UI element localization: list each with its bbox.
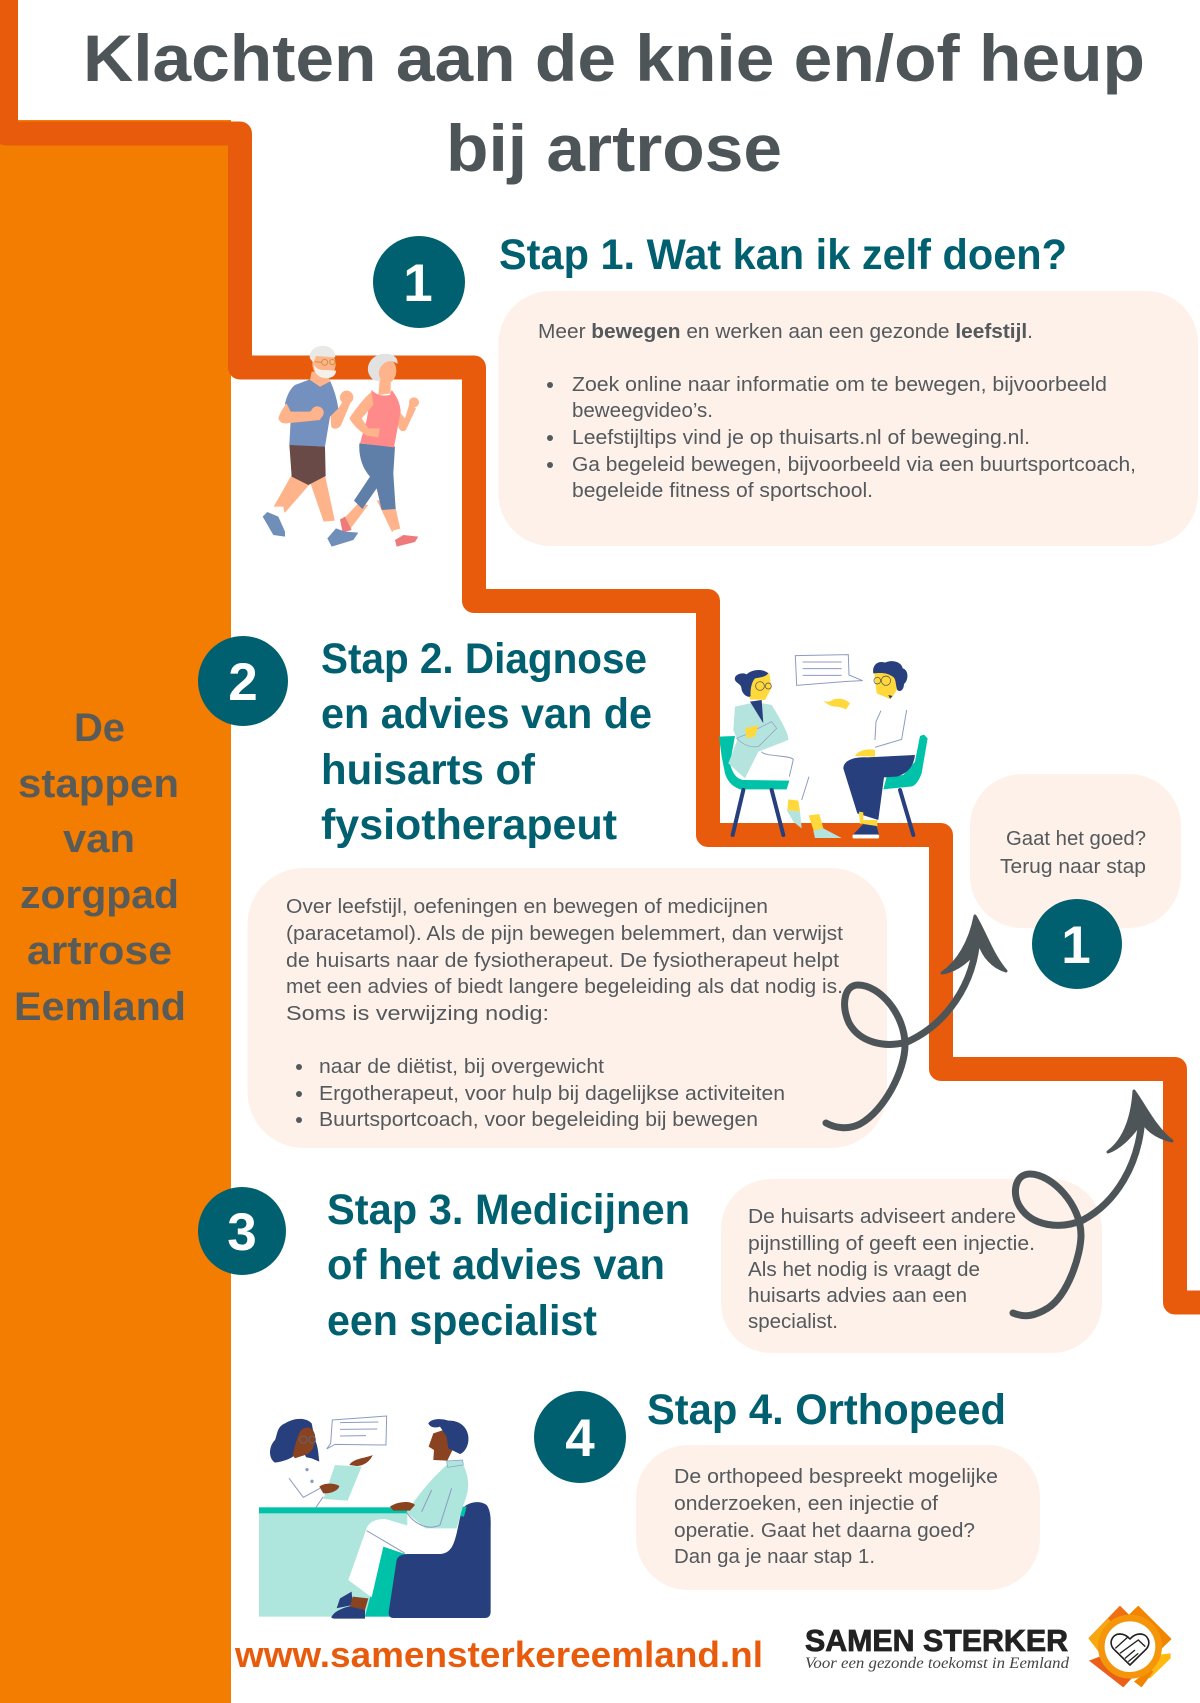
step 4 number badge: 4 — [565, 1409, 595, 1468]
panel: step 1 text: Ga begeleid bewegen, bijvoorbeeld via een buurtsportcoach, — [572, 454, 1136, 476]
side heading: artrose — [27, 929, 172, 973]
step 2 heading: Stap 2. Diagnose — [321, 635, 647, 683]
panel: step 4 text: De orthopeed bespreekt mogelijke — [674, 1466, 998, 1488]
step 1 heading: Stap 1. Wat kan ik zelf doen? — [499, 231, 1067, 279]
step 3 heading — [327, 1186, 690, 1345]
step 2 heading — [321, 635, 652, 849]
panel: step 2 text: naar de diëtist, bij overgewicht — [319, 1056, 604, 1078]
step 4 heading: Stap 4. Orthopeed — [647, 1386, 1006, 1434]
panel: step 1 text: beweegvideo’s. — [572, 400, 713, 422]
speech bubble — [795, 655, 863, 685]
panel: step 2 text: Over leefstijl, oefeningen en bewegen of medicijnen — [286, 896, 768, 918]
website url: www.samensterkereemland.nl — [234, 1634, 763, 1675]
step 3 number badge — [198, 1187, 286, 1275]
step 1 number badge — [373, 236, 465, 328]
side heading: van — [63, 817, 135, 861]
patient — [883, 735, 928, 789]
logo emblem — [1088, 1606, 1172, 1687]
step 3 heading: een specialist — [327, 1297, 597, 1345]
panel: step 1 text: begeleide fitness of sportschool. — [572, 480, 873, 502]
title: Klachten aan de knie en/of heup — [83, 21, 1145, 95]
panel: step 3 text: huisarts advies aan een — [748, 1285, 967, 1307]
step 3 number badge: 3 — [227, 1203, 257, 1262]
illustration: consultation at desk — [259, 1416, 491, 1619]
step 2 number badge: 2 — [228, 653, 258, 712]
panel: orange side column — [0, 120, 231, 1703]
step 1 number badge: 1 — [403, 254, 433, 313]
arrow: step 2 back to step 1 — [826, 916, 1006, 1128]
panel: step 2 text: Buurtsportcoach, voor begeleiding bij bewegen — [319, 1109, 758, 1131]
man — [273, 475, 310, 513]
panel: step 2 text: de huisarts naar de fysiotherapeut. De fysiotherapeut helpt — [286, 950, 839, 972]
title — [83, 21, 1145, 185]
illustration: doctor and patient sitting — [719, 655, 928, 838]
panel: step 1 text: Zoek online naar informatie om te bewegen, bijvoorbeeld — [572, 374, 1107, 396]
panel: back to step 1 callout: Gaat het goed? — [1006, 828, 1146, 850]
panel: step 4 text: Dan ga je naar stap 1. — [674, 1546, 875, 1568]
panel: step 3 text: specialist. — [748, 1311, 838, 1333]
panel: step 2 text: Ergotherapeut, voor hulp bij dagelijkse activiteiten — [319, 1083, 785, 1105]
woman — [344, 503, 368, 528]
panel: step 3 text: pijnstilling of geeft een injectie. — [748, 1233, 1035, 1255]
logo wordmark: SAMEN STERKER — [805, 1623, 1068, 1658]
side heading: Eemland — [14, 985, 186, 1029]
arrow: step 3 back to step 2 — [1013, 1091, 1172, 1316]
back to step 1 badge — [1032, 899, 1122, 989]
panel: step 3 text: De huisarts adviseert andere — [748, 1206, 1016, 1228]
panel: step 2 text: Soms is verwijzing nodig: — [286, 1003, 549, 1025]
side heading: zorgpad — [20, 873, 179, 917]
step 2 heading: en advies van de — [321, 690, 652, 738]
panel: step 1 text — [498, 291, 1198, 546]
logo wordmark: Voor een gezonde toekomst in Eemland — [805, 1655, 1069, 1672]
step 2 heading: huisarts of — [321, 746, 536, 794]
panel: step 2 text: met een advies of biedt langere begeleiding als dat nodig is. — [286, 976, 843, 998]
panel: step 3 text — [721, 1179, 1102, 1353]
step 2 heading: fysiotherapeut — [321, 801, 617, 849]
title: bij artrose — [446, 111, 782, 185]
illustration: two joggers — [263, 346, 419, 547]
step 4 number badge — [534, 1391, 626, 1483]
panel: step 4 text: operatie. Gaat het daarna goed? — [674, 1520, 975, 1542]
panel: back to step 1 callout: Terug naar stap — [1000, 856, 1146, 878]
woman doctor — [327, 1416, 387, 1449]
side heading — [14, 706, 186, 1029]
panel: step 3 text: Als het nodig is vraagt de — [748, 1259, 980, 1281]
panel: step 1 text: Meer bewegen en werken aan een gezonde leefstijl. — [538, 321, 1033, 343]
panel: step 4 text: onderzoeken, een injectie of — [674, 1493, 938, 1515]
step 3 heading: Stap 3. Medicijnen — [327, 1186, 690, 1234]
step 3 heading: of het advies van — [327, 1241, 665, 1289]
panel: back to step 1 callout — [970, 774, 1181, 928]
panel: step 2 text: (paracetamol). Als de pijn bewegen belemmert, dan verwijst — [286, 923, 843, 945]
back to step 1 badge: 1 — [1061, 916, 1091, 975]
panel: step 2 text — [248, 868, 887, 1148]
staircase line — [6, 0, 1200, 1302]
side heading: stappen — [18, 762, 179, 806]
panel: step 4 text — [636, 1445, 1040, 1590]
panel: step 1 text: Leefstijltips vind je op thuisarts.nl of beweging.nl. — [572, 427, 1030, 449]
doctor — [719, 736, 789, 789]
man patient — [331, 1592, 365, 1619]
side heading: De — [74, 706, 125, 750]
step 2 number badge — [198, 636, 288, 726]
